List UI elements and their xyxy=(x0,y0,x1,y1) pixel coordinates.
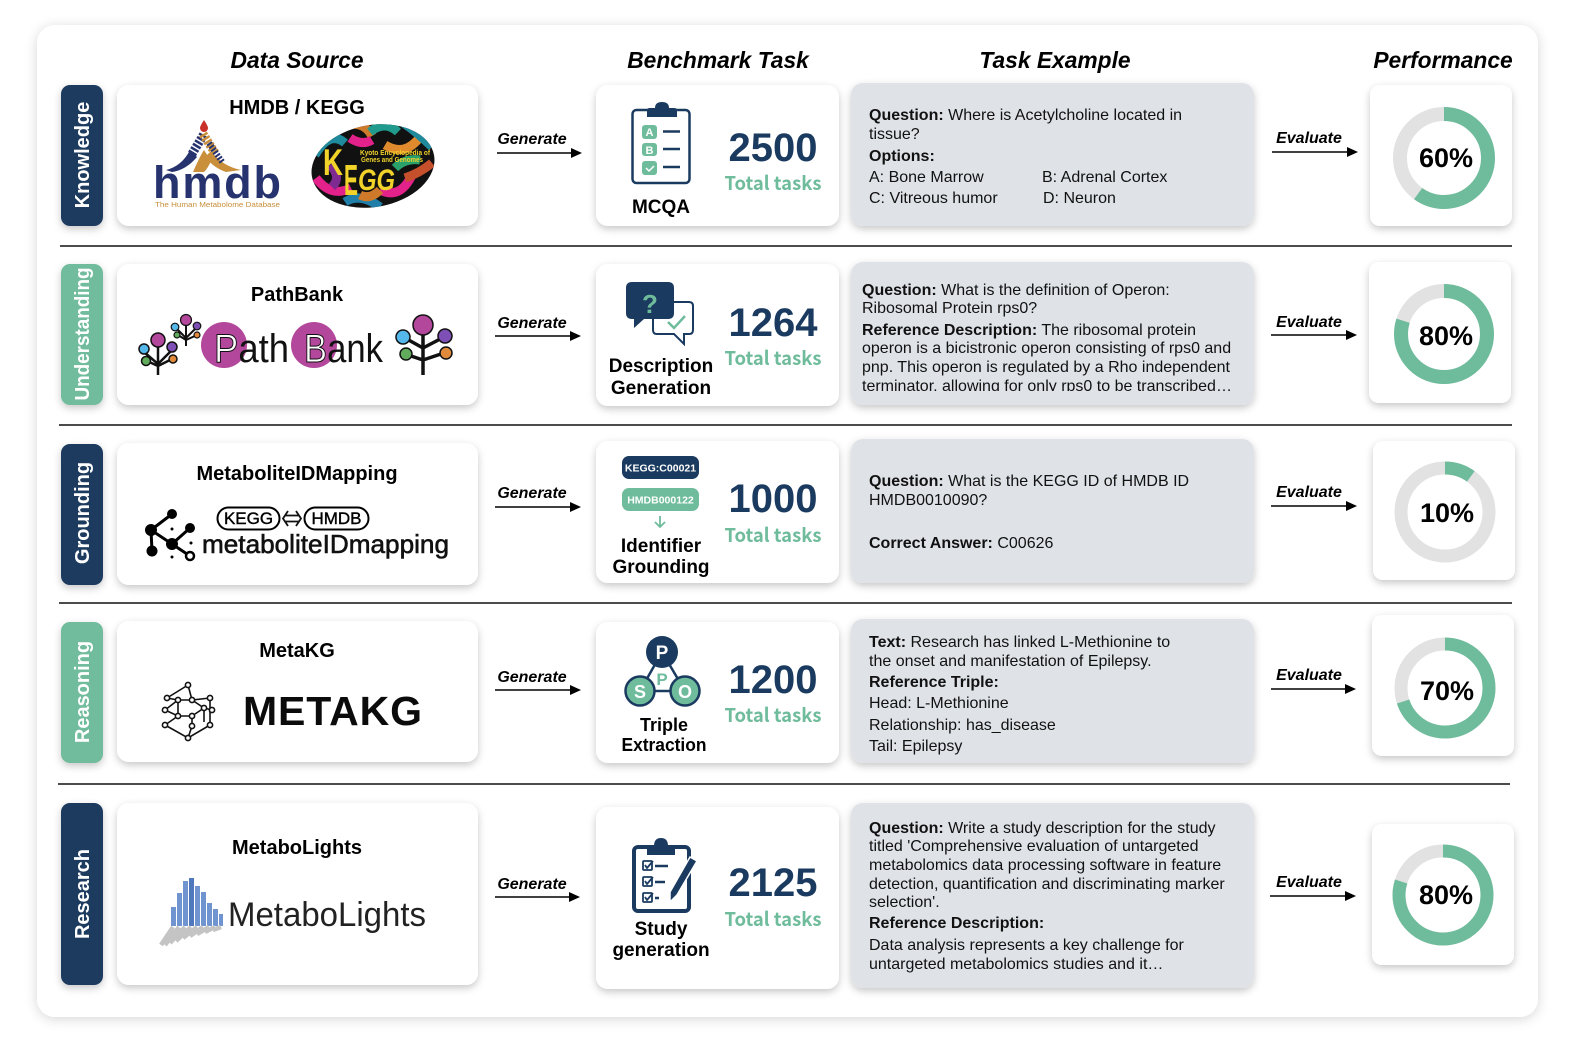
arrow: Generate (Research): Generate xyxy=(497,876,567,893)
logo: KEGG: GG xyxy=(358,164,395,197)
icon: subject predicate object triangle: P xyxy=(656,643,669,664)
panel: Description Generation task: Generation xyxy=(611,378,711,399)
panel: Triple Extraction task: Triple xyxy=(640,715,688,735)
row label: Understanding: Understanding xyxy=(72,268,94,400)
panel: Study generation task: 2125 xyxy=(729,861,817,905)
panel: task example (Knowledge): Options: xyxy=(869,148,935,165)
panel: task example (Understanding): Reference Description: The ribosomal protein xyxy=(862,322,1196,339)
panel: task example (Knowledge): D: Neuron xyxy=(1043,190,1116,207)
panel: performance 80% (Research): 80% xyxy=(1419,880,1473,910)
arrow: Generate (Knowledge) xyxy=(497,131,582,158)
icon: small tree left xyxy=(139,333,177,375)
row label: Reasoning: Reasoning xyxy=(72,641,94,743)
logo: MetaboLights: MetaboLights xyxy=(228,896,426,934)
icon: clipboard with options xyxy=(632,102,690,183)
logo: PathBank: Bank xyxy=(304,327,384,371)
panel: task example (Research): metabolomics data processing software in feature xyxy=(869,857,1221,874)
panel: performance 10% xyxy=(1373,441,1515,580)
panel: task example (Knowledge): C: Vitreous humor xyxy=(869,190,998,207)
icon: large tree right xyxy=(396,315,452,375)
panel: Triple Extraction task: Extraction xyxy=(622,735,706,755)
panel: Identifier Grounding task: Identifier xyxy=(621,536,702,557)
panel: MetaboliteIDMapping data source: MetaboliteIDMapping xyxy=(196,463,398,485)
logo: KEGG: E xyxy=(344,156,358,205)
icon: knowledge graph cube xyxy=(162,682,215,741)
panel: task example (Grounding): Question: What is the KEGG ID of HMDB ID xyxy=(869,473,1189,490)
arrow: Generate (Understanding): Generate xyxy=(497,315,567,332)
panel: task example (Research): detection, quantification and discriminating marker xyxy=(869,876,1225,893)
panel: PathBank data source xyxy=(117,264,478,405)
column headings: Data Source xyxy=(230,47,364,73)
panel: task example (Research): titled 'Comprehensive evaluation of untargeted xyxy=(869,838,1198,855)
icon: subject predicate object triangle xyxy=(626,636,700,706)
arrow: Generate (Knowledge): Generate xyxy=(497,131,567,148)
logo: METAKG xyxy=(162,682,422,741)
panel: Study generation task: Study xyxy=(635,919,688,940)
arrow: Evaluate (Research): Evaluate xyxy=(1276,874,1342,891)
panel: MetaKG data source xyxy=(117,621,478,762)
row label: Knowledge xyxy=(61,85,103,226)
logo: KEGG: Genes and Genomes xyxy=(361,157,423,164)
icon: spectrum bars xyxy=(161,878,223,945)
icon: question and answer bubbles: ? xyxy=(642,289,658,319)
panel: task example (Research): Data analysis represents a key challenge for xyxy=(869,937,1185,954)
icon: identifier pills: KEGG:C00021 xyxy=(625,462,696,474)
panel: MCQA task: 2500 xyxy=(729,126,817,170)
panel: performance 70% xyxy=(1372,615,1514,756)
panel: Identifier Grounding task: 1000 xyxy=(729,477,817,521)
logo: KEGG xyxy=(312,124,434,208)
logo: metaboliteIDmapping xyxy=(145,508,449,560)
panel: task example (Understanding) xyxy=(851,262,1254,405)
panel: Description Generation task: 1264 xyxy=(729,301,818,345)
panel: Identifier Grounding task: Grounding xyxy=(612,557,710,578)
icon: identifier pills: HMDB000122 xyxy=(627,494,694,506)
column headings: Performance xyxy=(1373,47,1513,73)
panel: HMDB / KEGG data source: HMDB / KEGG xyxy=(229,97,365,119)
panel: task example (Understanding): operon is a bicistronic operon consisting of rps0 and xyxy=(862,340,1231,357)
panel: task example (Knowledge): A: Bone Marrow xyxy=(869,169,984,186)
logo: KEGG: K xyxy=(323,142,343,183)
panel: task example (Grounding): Correct Answer: C00626 xyxy=(869,535,1053,552)
panel: task example (Knowledge) xyxy=(851,83,1254,226)
panel: task example (Understanding): Question: What is the definition of Operon: xyxy=(862,282,1170,299)
panel: Description Generation task: Description xyxy=(609,356,713,377)
panel: task example (Understanding): pnp. This operon is regulated by a Rho independent xyxy=(862,359,1231,376)
logo: hmdb: hmdb xyxy=(153,157,281,208)
icon: question and answer bubbles xyxy=(626,282,693,344)
panel: MetaboLights data source xyxy=(117,803,478,985)
arrow: Generate (Understanding) xyxy=(495,315,581,341)
panel: MCQA task: Total tasks xyxy=(724,169,822,196)
row label: Grounding: Grounding xyxy=(72,462,94,564)
panel: Study generation task: generation xyxy=(612,940,710,961)
panel: HMDB / KEGG data source xyxy=(117,85,478,226)
row label: Knowledge: Knowledge xyxy=(72,102,94,208)
panel: Triple Extraction task: 1200 xyxy=(729,658,817,702)
arrow: Evaluate (Reasoning): Evaluate xyxy=(1276,667,1342,684)
panel: task example (Reasoning): Head: L-Methionine xyxy=(869,695,1009,712)
logo: KEGG: Kyoto Encyclopedia of xyxy=(360,150,431,157)
panel: task example (Research): selection'. xyxy=(869,894,940,911)
panel: PathBank data source: PathBank xyxy=(251,284,344,306)
logo: metaboliteIDmapping: HMDB xyxy=(311,509,362,528)
arrow: Evaluate (Grounding) xyxy=(1271,484,1357,511)
panel: Triple Extraction task: Total tasks xyxy=(724,701,822,728)
panel: task example (Research): Question: Write a study description for the study xyxy=(869,820,1216,837)
panel: MetaKG data source: MetaKG xyxy=(259,640,335,662)
arrow: Evaluate (Research) xyxy=(1270,874,1356,901)
panel: task example (Research): Reference Description: xyxy=(869,915,1044,932)
arrow: Generate (Grounding): Generate xyxy=(497,485,567,502)
icon: subject predicate object triangle: P xyxy=(656,670,668,689)
row label: Grounding xyxy=(61,444,103,585)
logo: MetaboLights xyxy=(161,878,426,945)
panel: MCQA task xyxy=(596,85,839,226)
panel: task example (Reasoning): Reference Triple: xyxy=(869,674,999,691)
panel: performance 60% xyxy=(1370,85,1512,226)
panel: performance 70%: 70% xyxy=(1420,676,1474,706)
logo: metaboliteIDmapping: KEGG xyxy=(224,509,273,528)
logo: METAKG: METAKG xyxy=(243,688,422,734)
icon: tiny tree xyxy=(171,314,201,346)
arrow: Evaluate (Grounding): Evaluate xyxy=(1276,484,1342,501)
icon: clipboard with options: A xyxy=(646,127,654,139)
row label: Understanding xyxy=(61,264,103,405)
panel: task example (Knowledge): Question: Where is Acetylcholine located in xyxy=(869,107,1182,124)
logo: PathBank xyxy=(139,314,452,375)
panel: Identifier Grounding task: Total tasks xyxy=(724,521,822,548)
panel: task example (Reasoning) xyxy=(851,619,1254,763)
panel: task example (Knowledge): tissue? xyxy=(869,126,920,143)
panel: MCQA task: MCQA xyxy=(632,197,690,218)
logo: hmdb xyxy=(153,120,281,209)
logo: PathBank: Path xyxy=(214,327,289,371)
arrow: Evaluate (Reasoning) xyxy=(1271,667,1356,694)
panel: Identifier Grounding task xyxy=(596,441,839,583)
icon: subject predicate object triangle: S xyxy=(634,682,646,702)
panel: task example (Reasoning): Relationship: has_disease xyxy=(869,717,1056,734)
column headings: Benchmark Task xyxy=(627,47,810,73)
arrow: Evaluate (Understanding): Evaluate xyxy=(1276,314,1342,331)
panel: performance 80%: 80% xyxy=(1419,321,1473,351)
panel: task example (Understanding): Ribosomal Protein rps0? xyxy=(862,300,1037,317)
panel: task example (Research): untargeted metabolomics studies and it… xyxy=(869,956,1163,973)
panel: task example (Understanding): terminator, allowing for only rps0 to be transcribed… xyxy=(862,378,1232,395)
panel: Description Generation task xyxy=(596,264,839,406)
icon: molecular network xyxy=(145,509,195,560)
panel: task example (Reasoning): Text: Research has linked L-Methionine to xyxy=(869,634,1170,651)
column headings xyxy=(230,47,1513,73)
panel: task example (Reasoning): Tail: Epilepsy xyxy=(869,738,962,755)
row label: Reasoning xyxy=(61,622,103,763)
panel: performance 80% xyxy=(1369,262,1511,403)
arrow: Generate (Research) xyxy=(495,876,580,902)
panel: performance 10%: 10% xyxy=(1420,498,1474,528)
arrow: Generate (Grounding) xyxy=(495,485,581,512)
panel: MetaboliteIDMapping data source xyxy=(117,443,478,585)
panel: MetaboLights data source: MetaboLights xyxy=(232,837,362,859)
icon: clipboard with pen xyxy=(634,838,697,911)
icon: subject predicate object triangle: O xyxy=(678,682,692,702)
arrow: Evaluate (Understanding) xyxy=(1271,314,1357,340)
panel: task example (Grounding): HMDB0010090? xyxy=(869,492,987,509)
icon: identifier pills xyxy=(622,456,699,527)
logo: metaboliteIDmapping: metaboliteIDmapping xyxy=(202,529,449,559)
arrow: Evaluate (Knowledge) xyxy=(1272,130,1358,157)
panel: Description Generation task: Total tasks xyxy=(724,344,822,371)
panel: Triple Extraction task xyxy=(596,622,839,763)
icon: clipboard with options: B xyxy=(646,145,654,157)
arrow: Generate (Reasoning): Generate xyxy=(497,669,567,686)
panel: task example (Knowledge): B: Adrenal Cortex xyxy=(1042,169,1167,186)
arrow: Evaluate (Knowledge): Evaluate xyxy=(1276,130,1342,147)
column headings: Task Example xyxy=(979,47,1131,73)
row label: Research xyxy=(61,803,103,985)
panel: performance 80% (Research) xyxy=(1372,824,1514,965)
panel: task example (Grounding) xyxy=(851,439,1254,583)
panel: task example (Reasoning): the onset and manifestation of Epilepsy. xyxy=(869,653,1152,670)
panel: Study generation task: Total tasks xyxy=(724,905,822,932)
logo: hmdb: The Human Metabolome Database xyxy=(155,200,280,209)
panel: Study generation task xyxy=(596,807,839,989)
panel: performance 60%: 60% xyxy=(1419,143,1473,173)
panel: task example (Research) xyxy=(851,803,1254,988)
row label: Research: Research xyxy=(72,849,94,939)
arrow: Generate (Reasoning) xyxy=(495,669,581,695)
